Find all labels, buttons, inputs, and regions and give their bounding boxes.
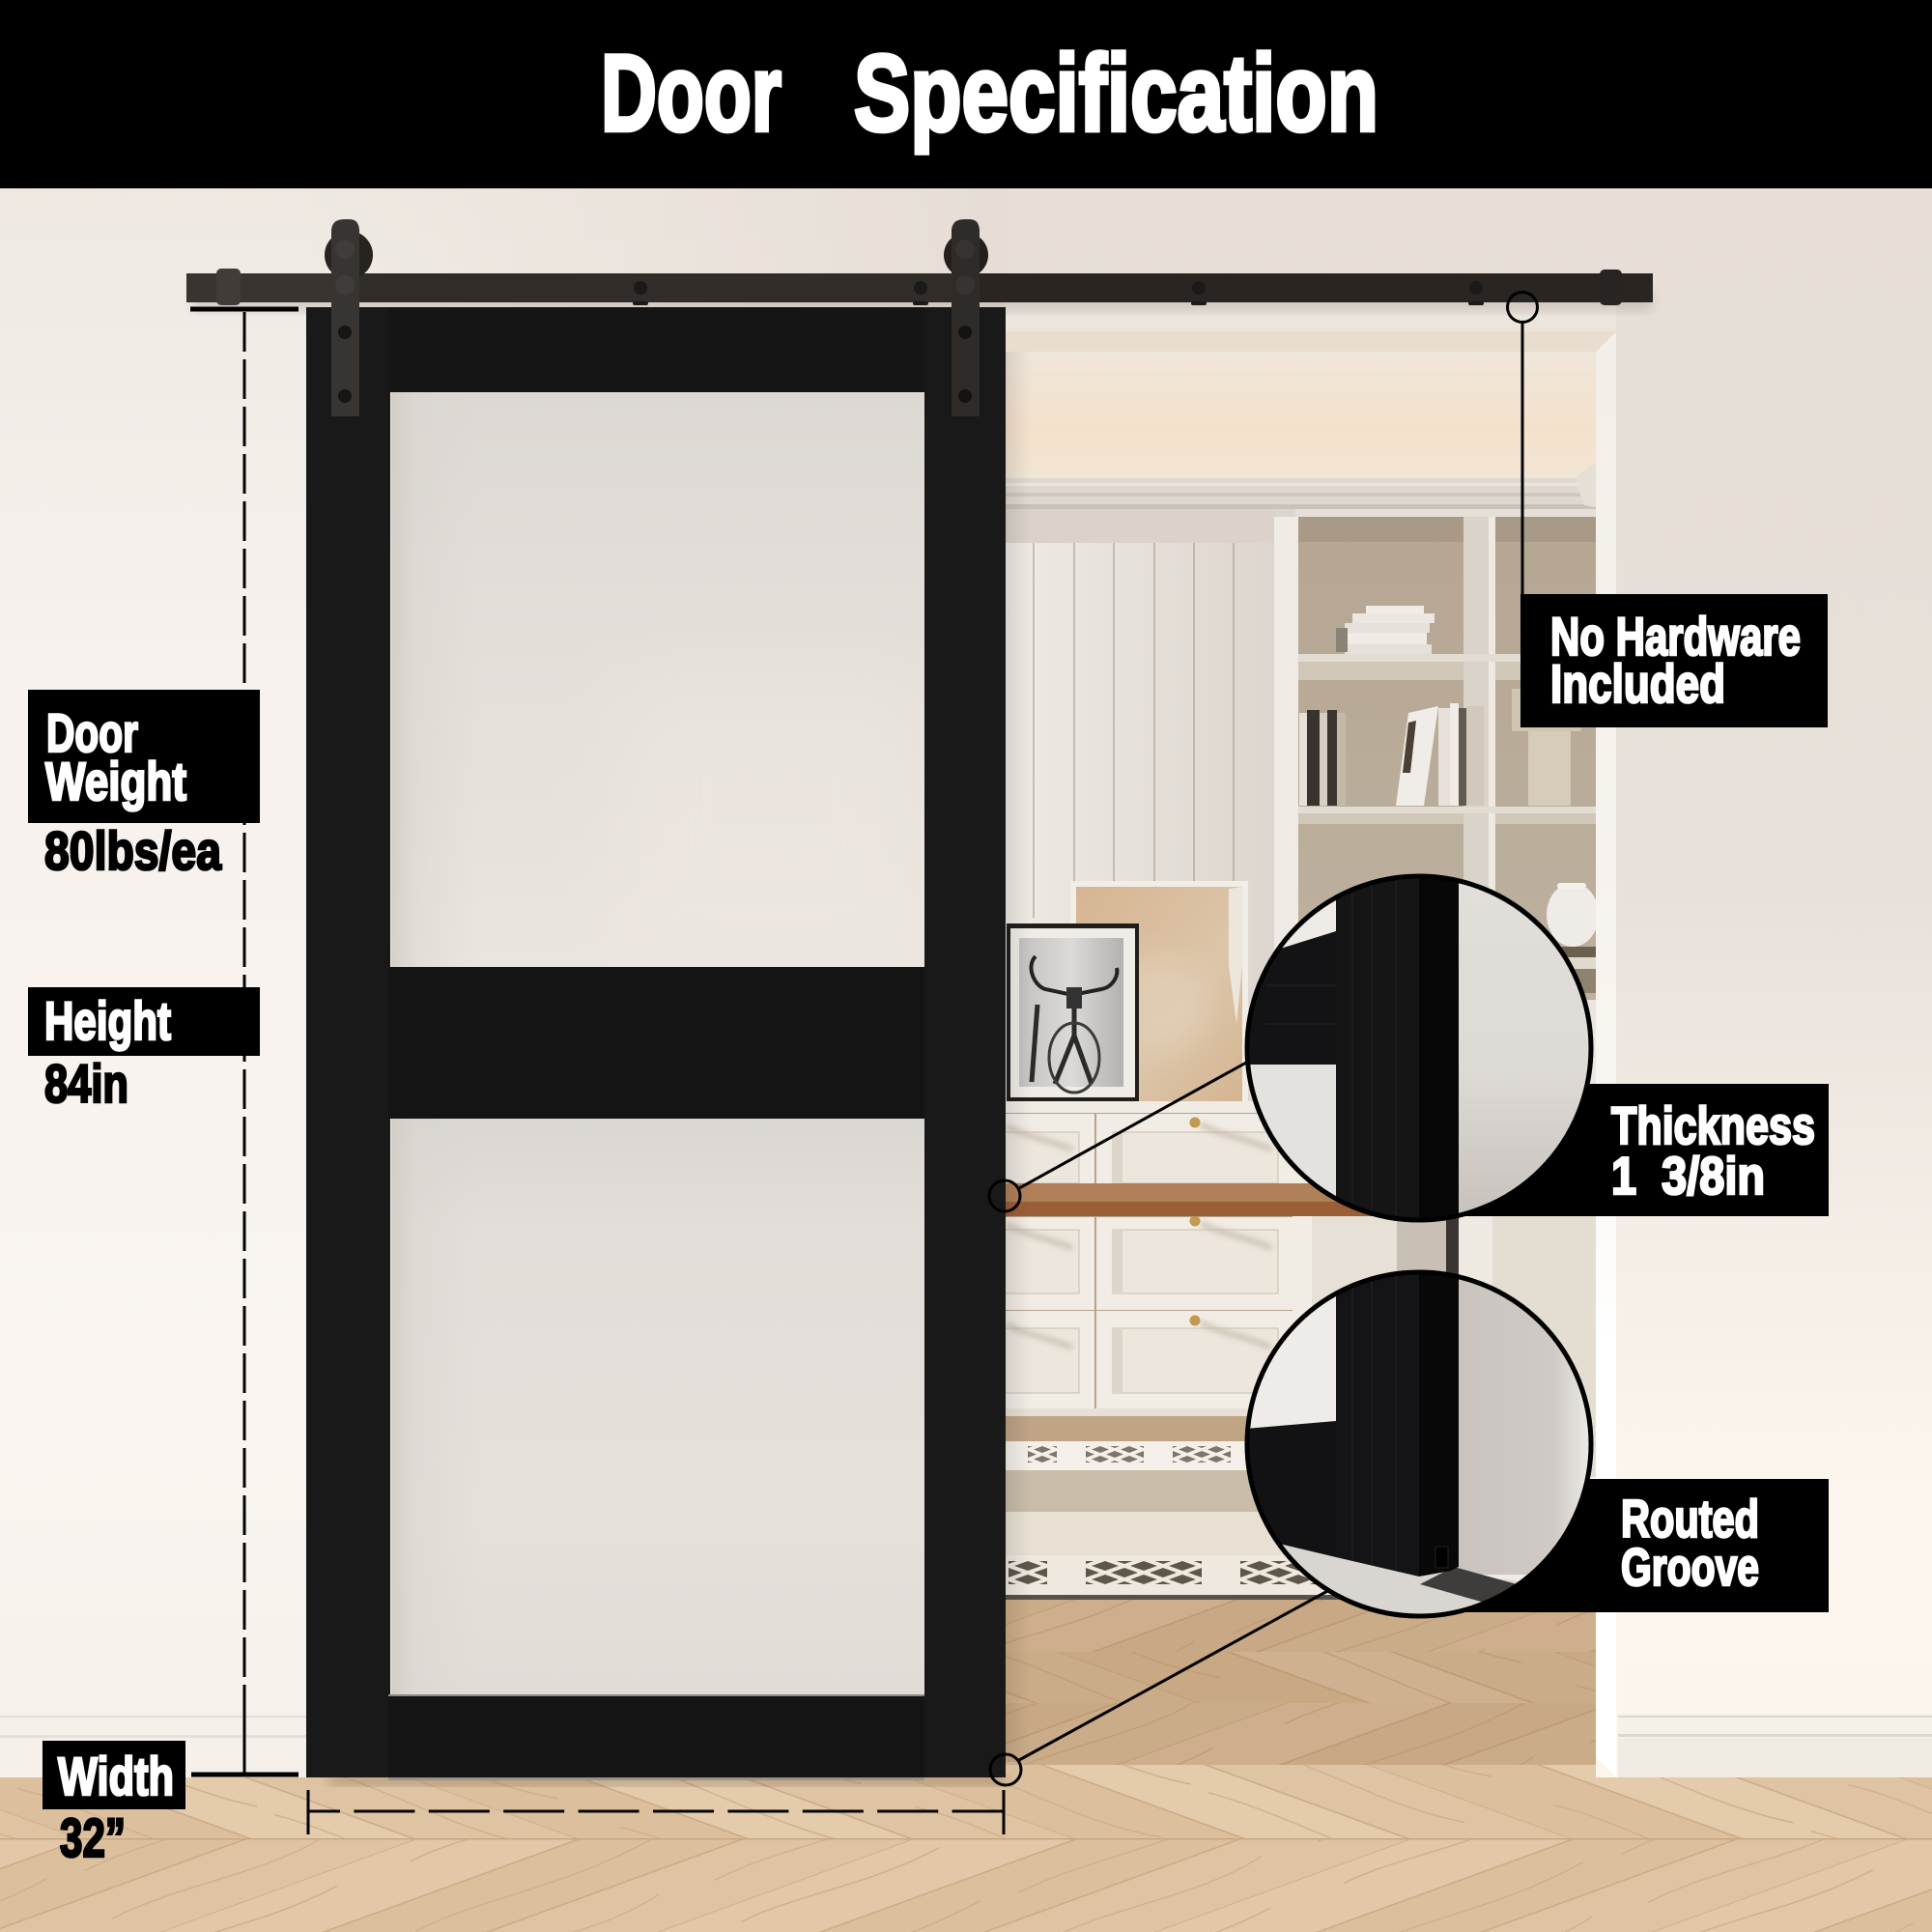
counter and cabinets: [1006, 1101, 1293, 1416]
recessed panels: [1005, 1132, 1278, 1393]
wooden worktop: [1006, 1183, 1373, 1216]
upright books right: [1396, 703, 1484, 806]
track shadow: [193, 290, 1652, 311]
leader: routed groove: [990, 1589, 1331, 1785]
value: 84in: 84in: [44, 1053, 128, 1114]
label: no hardware included: [1520, 594, 1828, 727]
wainscot panelling: [1006, 509, 1295, 1147]
upper frosted panel: [391, 392, 924, 967]
left roller hanger: [325, 219, 373, 416]
height dimension line: [190, 309, 298, 1775]
crown moulding: [1006, 462, 1596, 509]
right-hand cabinet columns: [1312, 1216, 1596, 1477]
label: thickness: [1459, 1084, 1829, 1216]
label: door weight: Weight: [45, 751, 186, 811]
detail circle: door thickness: [1246, 875, 1594, 1224]
lower frosted panel: [391, 1119, 924, 1695]
label: routed groove: Groove: [1621, 1537, 1759, 1597]
door cast shadow: [1006, 352, 1022, 1762]
cabinet doors row 1: [1005, 1114, 1293, 1183]
wood floor: [0, 1777, 1932, 1932]
cabinet doors row 3: [1005, 1311, 1293, 1408]
soffit and ceiling: [1006, 352, 1596, 478]
barn track rail: [186, 269, 1653, 305]
label: door weight: [28, 690, 260, 823]
brass knobs: [1190, 1117, 1200, 1325]
barn door: [306, 307, 1006, 1780]
label: door weight: Door: [46, 702, 138, 763]
value: 32 inches: 32”: [60, 1807, 126, 1869]
width dimension line: [308, 1790, 1004, 1834]
left end stop: [216, 269, 241, 305]
label: routed groove: [1459, 1479, 1829, 1612]
vase: [1547, 883, 1599, 957]
upright books left: [1299, 710, 1346, 806]
label: no hardware included: No Hardware: [1550, 606, 1801, 667]
bookcase: [1274, 517, 1596, 1000]
interior floor and rug: [1006, 1416, 1596, 1778]
label: width: Width: [58, 1746, 174, 1806]
title bar: [0, 0, 1932, 188]
label: thickness: Thickness: [1611, 1095, 1815, 1155]
soffit: [1006, 331, 1616, 352]
label: height: Height: [44, 990, 171, 1051]
tan art print: [1070, 881, 1248, 1103]
interior room seen through opening: [1005, 331, 1599, 1778]
panel bevels: [1113, 1132, 1122, 1393]
right stile: [924, 307, 1006, 1777]
leader: thickness: [989, 1063, 1246, 1211]
bottom rail: [388, 1695, 924, 1777]
track bolts: [633, 281, 1484, 305]
middle rail: [388, 967, 924, 1119]
label: routed groove: Routed: [1621, 1489, 1759, 1548]
wall band under track: [1006, 302, 1616, 331]
label: thickness: 1 3/8in: [1611, 1146, 1765, 1206]
label: no hardware included: Included: [1550, 653, 1725, 714]
title: Door: [601, 33, 781, 154]
title: Specification: [854, 33, 1378, 154]
right end stop: [1600, 270, 1622, 305]
baseboard left: [0, 1712, 306, 1777]
value: 80lbs/ea: 80lbs/ea: [44, 820, 222, 881]
leader: no hardware: [1507, 292, 1538, 594]
label: width: [43, 1741, 185, 1809]
right roller hanger: [944, 219, 988, 416]
left stile: [306, 307, 390, 1777]
door jamb: [1596, 331, 1616, 1777]
label: height: [28, 987, 260, 1056]
baseboard right: [1618, 1714, 1932, 1777]
sculpture: [1512, 689, 1581, 806]
framed bicycle photo: [1007, 923, 1139, 1101]
title: [601, 33, 1378, 154]
detail circle: routed groove: [1246, 1270, 1594, 1623]
cabinet doors row 2: [1005, 1217, 1293, 1310]
stack of books: [1336, 606, 1435, 654]
door floor shadow: [328, 1776, 1005, 1785]
top rail: [388, 307, 924, 392]
knob shadows: [1007, 1124, 1271, 1348]
